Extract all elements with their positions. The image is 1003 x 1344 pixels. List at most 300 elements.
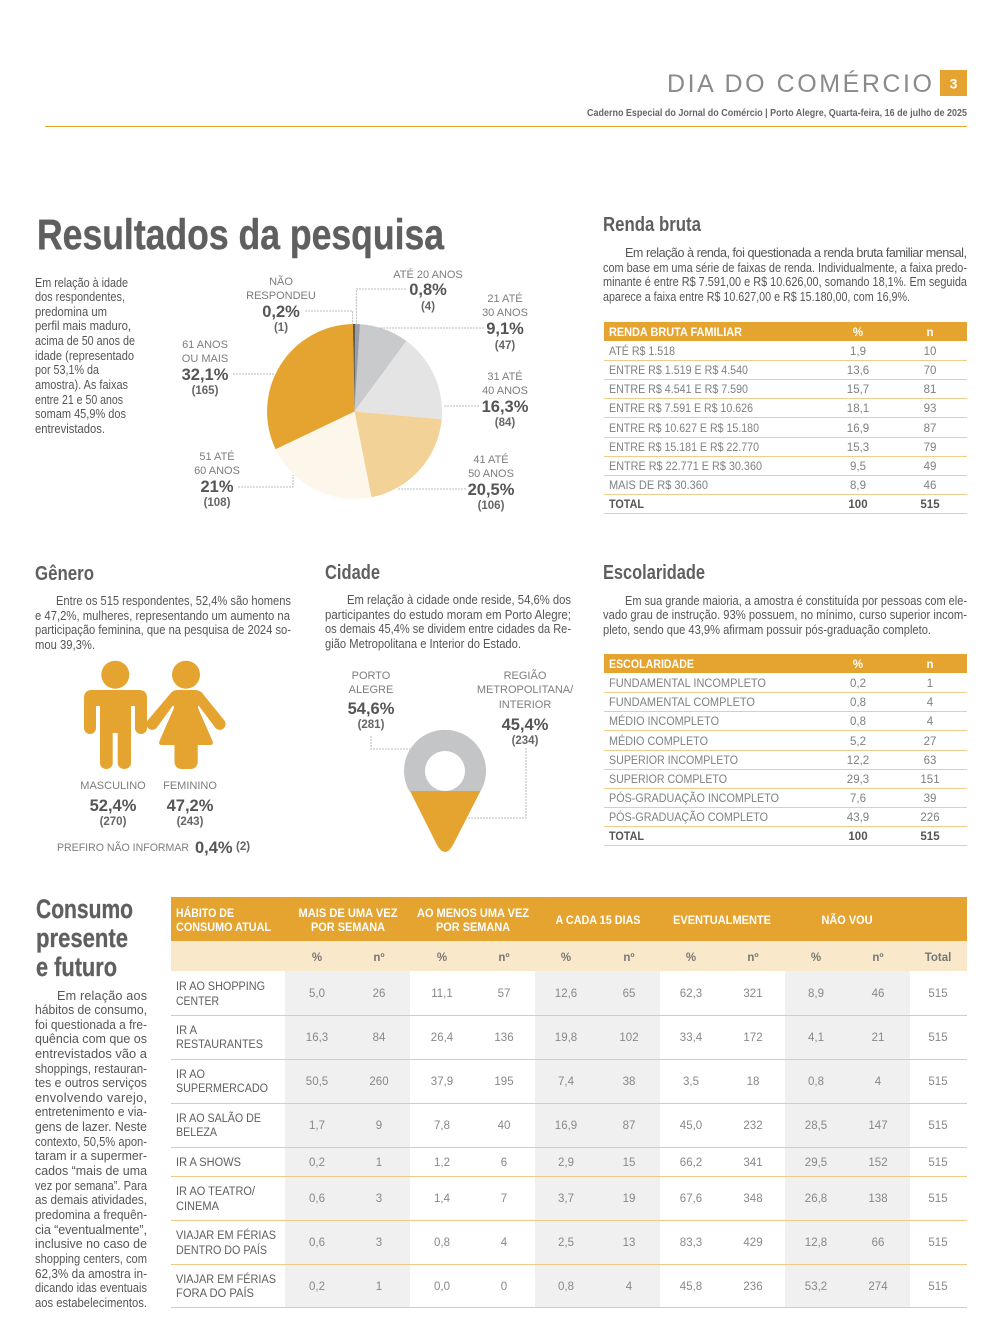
table: renda bruta familiar: MAIS DE R$ 30.360 xyxy=(609,480,708,492)
row: teatro cinema: 26,8 xyxy=(805,1193,827,1205)
pie label: 21 até 30 anos: 21 ATÉ xyxy=(487,292,523,305)
heading: consumo presente e futuro: presente xyxy=(36,923,128,953)
table header row xyxy=(176,907,872,934)
table: renda bruta familiar: 1,9 xyxy=(850,346,866,358)
row: restaurantes: 16,3 xyxy=(306,1032,328,1044)
pie label: 41 até 50 anos: 41 ATÉ xyxy=(473,453,509,466)
pie label: 41 até 50 anos: 20,5% xyxy=(468,481,515,499)
pie label: 31 até 40 anos xyxy=(444,370,529,429)
table: escolaridade: 0,8 xyxy=(850,697,866,709)
table sub-header row xyxy=(312,952,951,964)
table: escolaridade: TOTAL xyxy=(609,831,644,843)
pie label: até 20 anos xyxy=(356,268,463,324)
row: restaurantes: 136 xyxy=(494,1032,514,1044)
heading: consumo presente e futuro xyxy=(36,894,133,982)
row: shopping: 8,9 xyxy=(808,988,824,1000)
row: supermercado: IR AO xyxy=(176,1069,205,1081)
text block: escolaridade: vado grau de instrução. 93% possuem, no mínimo, curso superior incom- xyxy=(603,608,967,622)
text block: consumo: as demais atividades, xyxy=(35,1193,147,1207)
row: teatro cinema xyxy=(176,1186,948,1213)
label: feminino: FEMININO xyxy=(163,780,217,792)
table: renda bruta familiar: 49 xyxy=(924,461,936,473)
row: restaurantes: 4,1 xyxy=(808,1032,824,1044)
table: renda bruta familiar: 15,7 xyxy=(847,384,869,396)
row: restaurantes: 33,4 xyxy=(680,1032,703,1044)
pie label: 31 até 40 anos: 31 ATÉ xyxy=(487,370,523,383)
row: férias fora do país: 53,2 xyxy=(805,1281,827,1293)
icon: location pin xyxy=(404,730,486,852)
pie label: 31 até 40 anos: (84) xyxy=(495,417,515,429)
table header row: A CADA 15 DIAS xyxy=(556,915,641,927)
pie label: 61 anos ou mais: 61 ANOS xyxy=(182,339,228,351)
row: teatro cinema: 515 xyxy=(928,1193,948,1205)
row: supermercado: 195 xyxy=(494,1076,514,1088)
table header row: AO MENOS UMA VEZ xyxy=(417,908,529,920)
table: escolaridade: 0,8 xyxy=(850,716,866,728)
table: escolaridade: SUPERIOR INCOMPLETO xyxy=(609,755,738,767)
table: escolaridade: n xyxy=(926,659,934,671)
table: renda bruta familiar: ENTRE R$ 4.541 E R$ 7.590 xyxy=(609,384,748,396)
table: renda bruta familiar: 81 xyxy=(924,384,936,396)
text block: consumo: dicando idas eventuais xyxy=(35,1281,147,1295)
pie label: 51 até 60 anos xyxy=(194,450,293,509)
text block: renda: aparece a faixa entre R$ 10.627,00 e R$ 15.180,00, com 16,9%. xyxy=(603,290,910,304)
pie label: 41 até 50 anos xyxy=(398,453,515,512)
text block: consumo: gens de lazer. Neste xyxy=(35,1120,147,1134)
panel: gênero xyxy=(35,563,291,857)
text block: consumo: shoppings, restauran- xyxy=(35,1062,147,1076)
row: shopping: 11,1 xyxy=(431,988,453,1000)
row: salão de beleza: 515 xyxy=(928,1120,948,1132)
row: shopping: 65 xyxy=(623,988,635,1000)
row: teatro cinema: 7 xyxy=(501,1193,507,1205)
row: restaurantes: 84 xyxy=(373,1032,386,1044)
heading: gênero: Gênero xyxy=(35,563,94,585)
row: shopping: CENTER xyxy=(176,996,219,1008)
text block: age intro: predomina um xyxy=(35,305,107,319)
row: supermercado: 50,5 xyxy=(306,1076,328,1088)
label: masculino: (270) xyxy=(100,816,127,828)
row: férias dentro do país: 13 xyxy=(623,1237,635,1249)
label: porto alegre: 54,6% xyxy=(348,700,395,718)
row: férias fora do país: 515 xyxy=(928,1281,948,1293)
pie label: 51 até 60 anos: (108) xyxy=(204,497,231,509)
table: renda bruta familiar: % xyxy=(853,327,863,339)
table: renda bruta familiar: 70 xyxy=(924,365,936,377)
table: renda bruta familiar: 93 xyxy=(924,403,936,415)
text block: consumo xyxy=(35,989,147,1310)
pie label: até 20 anos: 0,8% xyxy=(409,281,447,299)
table header row: NÃO VOU xyxy=(822,914,872,927)
row: férias fora do país: 4 xyxy=(626,1281,633,1293)
label: prefiro não informar: PREFIRO NÃO INFORMAR xyxy=(57,841,189,854)
row: teatro cinema: 67,6 xyxy=(680,1193,702,1205)
table header row: POR SEMANA xyxy=(436,922,510,934)
label: feminino: (243) xyxy=(177,816,204,828)
panel: cidade xyxy=(325,562,574,852)
table: renda bruta familiar: 79 xyxy=(924,442,936,454)
pie label: não respondeu: NÃO xyxy=(269,275,293,288)
row: shows: 152 xyxy=(868,1157,888,1169)
pie label: 31 até 40 anos: 40 ANOS xyxy=(482,385,528,397)
text block: consumo: cia “eventualmente”, xyxy=(35,1223,147,1237)
table: escolaridade: MÉDIO INCOMPLETO xyxy=(609,715,719,728)
label: região metropolitana: (234) xyxy=(512,735,539,747)
table: escolaridade: 100 xyxy=(848,831,868,843)
row: restaurantes: 19,8 xyxy=(555,1032,577,1044)
row: teatro cinema: IR AO TEATRO/ xyxy=(176,1186,256,1198)
pie label: 51 até 60 anos: 51 ATÉ xyxy=(199,450,235,463)
table header row: CONSUMO ATUAL xyxy=(176,922,271,934)
row: shows: 515 xyxy=(928,1157,948,1169)
text block: consumo: 62,3% da amostra in- xyxy=(35,1267,147,1281)
pie label: 21 até 30 anos: (47) xyxy=(495,340,515,352)
table: renda bruta familiar: 10 xyxy=(924,346,936,358)
table: renda bruta familiar: ENTRE R$ 7.591 E R$ 10.626 xyxy=(609,403,753,415)
row: shopping xyxy=(176,981,948,1008)
row: salão de beleza: 1,7 xyxy=(309,1120,325,1132)
row: supermercado: 260 xyxy=(369,1076,389,1088)
pie label: 21 até 30 anos: 9,1% xyxy=(486,320,524,338)
table sub-header row: % xyxy=(437,952,447,964)
text block: consumo: cados “mais de uma xyxy=(35,1164,147,1178)
heading: consumo presente e futuro: e futuro xyxy=(36,952,117,982)
table: escolaridade: 0,2 xyxy=(850,678,866,690)
table: escolaridade: 7,6 xyxy=(850,793,866,805)
text block: consumo: inclusive no caso de xyxy=(35,1237,147,1251)
row: shopping: 46 xyxy=(872,988,884,1000)
row: supermercado: 0,8 xyxy=(808,1076,824,1088)
row: férias dentro do país: 66 xyxy=(872,1237,884,1249)
table: escolaridade: 515 xyxy=(920,831,940,843)
table: renda bruta familiar: 18,1 xyxy=(847,403,869,415)
label: masculino xyxy=(80,780,146,828)
label: região metropolitana: METROPOLITANA/ xyxy=(477,684,574,696)
row: shopping: 62,3 xyxy=(680,988,702,1000)
row: férias dentro do país: 3 xyxy=(376,1237,382,1249)
table sub-header row: nº xyxy=(498,952,510,964)
table sub-header row: % xyxy=(312,952,322,964)
table: renda bruta familiar: RENDA BRUTA FAMILIAR xyxy=(609,327,743,339)
row: shopping: 26 xyxy=(373,988,385,1000)
table: renda bruta familiar: 46 xyxy=(924,480,936,492)
text block: age intro: perfil mais maduro, xyxy=(35,319,131,333)
table: renda bruta familiar: 9,5 xyxy=(850,461,866,473)
row: supermercado: SUPERMERCADO xyxy=(176,1083,268,1095)
text block: consumo: envolvendo varejo, xyxy=(35,1091,147,1105)
pie label: 61 anos ou mais xyxy=(182,339,275,397)
row: salão de beleza: 147 xyxy=(868,1120,888,1132)
pie chart: age xyxy=(267,324,442,499)
row: shopping: 57 xyxy=(498,988,510,1000)
row: férias dentro do país: 4 xyxy=(501,1237,508,1249)
label: prefiro não informar: (2) xyxy=(236,841,250,853)
row: salão de beleza: 7,8 xyxy=(434,1120,450,1132)
row: salão de beleza: 16,9 xyxy=(555,1120,577,1132)
heading: cidade: Cidade xyxy=(325,562,380,584)
panel: escolaridade xyxy=(603,562,967,846)
table sub-header row: % xyxy=(811,952,821,964)
row: shopping: IR AO SHOPPING xyxy=(176,981,265,993)
table header row: EVENTUALMENTE xyxy=(673,915,771,927)
row: salão de beleza: 9 xyxy=(376,1120,382,1132)
icon: woman xyxy=(146,661,226,769)
text block: renda: Em relação à renda, foi questionada a renda bruta familiar mensal, xyxy=(625,246,967,260)
row: shows: 15 xyxy=(623,1157,635,1169)
page header: 3 xyxy=(950,76,958,92)
text block: cidade: participantes do estudo moram em Porto Alegre; xyxy=(325,608,571,622)
row: salão de beleza: IR AO SALÃO DE xyxy=(176,1112,261,1125)
table sub-header row: nº xyxy=(747,952,759,964)
table header row: HÁBITO DE xyxy=(176,907,234,920)
label: porto alegre: ALEGRE xyxy=(349,684,393,696)
pie label: 41 até 50 anos: 50 ANOS xyxy=(468,468,514,480)
label: masculino: MASCULINO xyxy=(80,780,146,792)
table: escolaridade: FUNDAMENTAL INCOMPLETO xyxy=(609,678,766,690)
pie label: até 20 anos: ATÉ 20 ANOS xyxy=(393,268,463,281)
label: porto alegre xyxy=(348,670,410,749)
table: renda bruta familiar: n xyxy=(926,327,934,339)
table: hábito de consumo xyxy=(171,897,967,1308)
row: férias dentro do país: 2,5 xyxy=(558,1237,574,1249)
row: shopping: 515 xyxy=(928,988,948,1000)
row: férias fora do país: 0 xyxy=(501,1281,507,1293)
label: região metropolitana xyxy=(468,669,574,818)
pie label: até 20 anos: (4) xyxy=(421,301,435,313)
row: supermercado: 3,5 xyxy=(683,1076,699,1088)
text block: gênero: Entre os 515 respondentes, 52,4% são homens xyxy=(56,594,291,608)
row: supermercado: 37,9 xyxy=(431,1076,453,1088)
label: porto alegre: (281) xyxy=(358,719,385,731)
row: restaurantes: 515 xyxy=(928,1032,948,1044)
table: renda bruta familiar: 87 xyxy=(924,423,936,435)
row: férias fora do país: 0,8 xyxy=(558,1281,574,1293)
text block: age intro: dos respondentes, xyxy=(35,290,125,304)
row: shows: 6 xyxy=(501,1157,507,1169)
row: férias dentro do país: VIAJAR EM FÉRIAS xyxy=(176,1229,276,1242)
table sub-header row: % xyxy=(686,952,696,964)
text block: consumo: vez por semana”. Para xyxy=(35,1179,147,1193)
row: shows: IR A SHOWS xyxy=(176,1157,241,1169)
pie label: 61 anos ou mais: 32,1% xyxy=(182,366,229,384)
table: escolaridade: ESCOLARIDADE xyxy=(609,659,694,671)
table: escolaridade: FUNDAMENTAL COMPLETO xyxy=(609,697,755,709)
table sub-header row: % xyxy=(561,952,571,964)
table: escolaridade: 43,9 xyxy=(847,812,869,824)
pie label: 61 anos ou mais: (165) xyxy=(192,385,219,397)
label: masculino: 52,4% xyxy=(90,797,137,815)
label: região metropolitana: 45,4% xyxy=(502,716,549,734)
table: escolaridade: 4 xyxy=(927,697,934,709)
table sub-header row: nº xyxy=(373,952,385,964)
pie label: 51 até 60 anos: 60 ANOS xyxy=(194,465,240,477)
row: férias dentro do país xyxy=(176,1229,948,1257)
text block: age intro xyxy=(35,276,135,436)
row: férias fora do país xyxy=(176,1273,948,1300)
text block: gênero: mou 39,3%. xyxy=(35,638,95,652)
pie label: não respondeu: (1) xyxy=(274,322,288,334)
pie label: 41 até 50 anos: (106) xyxy=(478,500,505,512)
label: feminino xyxy=(163,780,217,828)
row: restaurantes: 26,4 xyxy=(431,1032,454,1044)
row: teatro cinema: 1,4 xyxy=(434,1193,451,1205)
row: férias fora do país: 0,2 xyxy=(309,1281,325,1293)
text block: age intro: por 53,1% da xyxy=(35,363,99,377)
text block: age intro: entrevistados. xyxy=(35,422,105,436)
text block: cidade: os demais 45,4% se dividem entre cidades da Re- xyxy=(325,622,571,636)
row: shopping: 5,0 xyxy=(309,988,325,1000)
text block: escolaridade xyxy=(603,594,967,637)
title: Resultados da pesquisa xyxy=(37,211,445,259)
pie label: 61 anos ou mais: OU MAIS xyxy=(182,353,228,365)
heading: renda bruta: Renda bruta xyxy=(603,214,702,236)
row: teatro cinema: 3,7 xyxy=(558,1193,574,1205)
pie label: 31 até 40 anos: 16,3% xyxy=(482,398,529,416)
row: salão de beleza: 45,0 xyxy=(680,1120,702,1132)
row: restaurantes: 172 xyxy=(743,1032,763,1044)
heading: escolaridade: Escolaridade xyxy=(603,562,705,584)
row: shopping: 12,6 xyxy=(555,988,577,1000)
row: restaurantes: RESTAURANTES xyxy=(176,1039,263,1051)
row: shows: 29,5 xyxy=(805,1157,827,1169)
heading: consumo presente e futuro: Consumo xyxy=(36,894,133,924)
row: teatro cinema: 3 xyxy=(376,1193,382,1205)
table: renda bruta familiar: 100 xyxy=(848,499,868,511)
row: teatro cinema: 138 xyxy=(868,1193,888,1205)
table: renda bruta familiar: ENTRE R$ 15.181 E R$ 22.770 xyxy=(609,442,759,454)
row: shows: 0,2 xyxy=(309,1157,325,1169)
label: região metropolitana: INTERIOR xyxy=(499,699,551,711)
page header: DIA DO COMÉRCIO xyxy=(667,69,932,98)
text block: age intro: idade (representado xyxy=(35,349,134,363)
row: shows: 341 xyxy=(743,1157,763,1169)
table: renda bruta familiar: 15,3 xyxy=(847,442,869,454)
row: salão de beleza: 87 xyxy=(623,1120,635,1132)
row: salão de beleza: 40 xyxy=(498,1120,510,1132)
table: renda bruta familiar xyxy=(604,322,967,514)
pie label: não respondeu xyxy=(246,275,353,334)
row: férias fora do país: 1 xyxy=(376,1281,382,1293)
table header row: POR SEMANA xyxy=(311,922,385,934)
row: férias dentro do país: 12,8 xyxy=(805,1237,827,1249)
table: renda bruta familiar: 13,6 xyxy=(847,365,869,377)
text block: age intro: Em relação à idade xyxy=(35,276,128,290)
table sub-header row: Total xyxy=(925,952,951,964)
row: férias fora do país: FORA DO PAÍS xyxy=(176,1287,254,1300)
row: teatro cinema: 0,6 xyxy=(309,1193,325,1205)
row: supermercado xyxy=(176,1069,948,1095)
row: shows: 1,2 xyxy=(434,1157,450,1169)
table: renda bruta familiar: 8,9 xyxy=(850,480,866,492)
table: renda bruta familiar: 515 xyxy=(920,499,940,511)
table: escolaridade: 63 xyxy=(924,755,936,767)
label: prefiro não informar: 0,4% xyxy=(195,839,233,857)
row: férias fora do país: 274 xyxy=(868,1281,888,1293)
row: férias dentro do país: 429 xyxy=(743,1237,763,1249)
table: renda bruta familiar: ENTRE R$ 10.627 E R$ 15.180 xyxy=(609,423,759,435)
table: renda bruta familiar: ENTRE R$ 1.519 E R$ 4.540 xyxy=(609,365,748,377)
row: supermercado: 38 xyxy=(623,1076,635,1088)
label: prefiro não informar xyxy=(57,839,250,857)
text block: consumo: taram ir a supermer- xyxy=(35,1149,147,1163)
pie label: 51 até 60 anos: 21% xyxy=(200,478,234,496)
text block: age intro: amostra). As faixas xyxy=(35,378,128,392)
row: férias dentro do país: 0,6 xyxy=(309,1237,325,1249)
text block: consumo: contexto, 50,5% apon- xyxy=(35,1135,147,1149)
text block: consumo: tes e outros serviços xyxy=(35,1076,147,1090)
pie label: não respondeu: 0,2% xyxy=(262,303,300,321)
row: restaurantes: 102 xyxy=(619,1032,639,1044)
row: supermercado: 515 xyxy=(928,1076,948,1088)
table: escolaridade: 151 xyxy=(920,774,940,786)
row: férias fora do país: VIAJAR EM FÉRIAS xyxy=(176,1273,276,1286)
row: férias fora do país: 236 xyxy=(743,1281,763,1293)
row: supermercado: 7,4 xyxy=(558,1076,575,1088)
table: escolaridade: MÉDIO COMPLETO xyxy=(609,735,708,748)
text block: gênero: participação feminina, que na pesquisa de 2024 so- xyxy=(35,623,291,637)
table: renda bruta familiar: TOTAL xyxy=(609,499,644,511)
row: salão de beleza: BELEZA xyxy=(176,1127,217,1139)
text block: consumo: hábitos de consumo, xyxy=(35,1003,147,1017)
text block: renda xyxy=(603,246,967,304)
text block: consumo: entretenimento e via- xyxy=(35,1105,147,1119)
row: teatro cinema: 348 xyxy=(743,1193,763,1205)
table: escolaridade xyxy=(604,654,967,846)
table: escolaridade: SUPERIOR COMPLETO xyxy=(609,774,727,786)
row: teatro cinema: 19 xyxy=(623,1193,635,1205)
table: escolaridade: 226 xyxy=(920,812,940,824)
row: férias dentro do país: 0,8 xyxy=(434,1237,450,1249)
text block: cidade xyxy=(325,593,571,651)
row: shows: 66,2 xyxy=(680,1157,702,1169)
text block: age intro: somam 45,9% dos xyxy=(35,407,126,421)
row: shows: 2,9 xyxy=(558,1157,574,1169)
pie label: não respondeu: RESPONDEU xyxy=(246,290,316,302)
page header xyxy=(45,69,967,127)
table sub-header row: nº xyxy=(872,952,884,964)
row: férias dentro do país: 515 xyxy=(928,1237,948,1249)
table: escolaridade: 4 xyxy=(927,716,934,728)
row: restaurantes xyxy=(176,1025,948,1051)
table: escolaridade: 39 xyxy=(924,793,936,805)
table: renda bruta familiar: ENTRE R$ 22.771 E R$ 30.360 xyxy=(609,461,762,473)
row: férias fora do país: 0,0 xyxy=(434,1281,450,1293)
table: escolaridade: 29,3 xyxy=(847,774,869,786)
row: supermercado: 4 xyxy=(875,1076,882,1088)
row: salão de beleza: 28,5 xyxy=(805,1120,827,1132)
panel: renda bruta xyxy=(603,214,967,514)
table: escolaridade: 12,2 xyxy=(847,755,869,767)
text block: age intro: entre 21 e 50 anos xyxy=(35,393,123,407)
pie label: 21 até 30 anos xyxy=(380,292,528,352)
row: shopping: 321 xyxy=(743,988,763,1000)
text block: consumo: predomina a frequên- xyxy=(35,1208,147,1222)
row: salão de beleza: 232 xyxy=(743,1120,763,1132)
row: restaurantes: 21 xyxy=(872,1032,884,1044)
row: férias dentro do país: 83,3 xyxy=(680,1237,702,1249)
row: salão de beleza xyxy=(176,1112,948,1139)
row: shows xyxy=(176,1157,948,1169)
table: escolaridade: PÓS-GRADUAÇÃO COMPLETO xyxy=(609,811,768,824)
text block: escolaridade: pleto, sendo que 43,9% afirmam possuir pós-graduação completo. xyxy=(603,623,931,637)
table: escolaridade: 1 xyxy=(927,678,933,690)
text block: consumo: Em relação aos xyxy=(57,989,147,1003)
text block: age intro: acima de 50 anos de xyxy=(35,334,135,348)
table: escolaridade: PÓS-GRADUAÇÃO INCOMPLETO xyxy=(609,792,779,805)
table: escolaridade: % xyxy=(853,659,863,671)
text block: gênero: e 47,2%, mulheres, representando um aumento na xyxy=(35,609,290,623)
row: férias fora do país: 45,8 xyxy=(680,1281,702,1293)
